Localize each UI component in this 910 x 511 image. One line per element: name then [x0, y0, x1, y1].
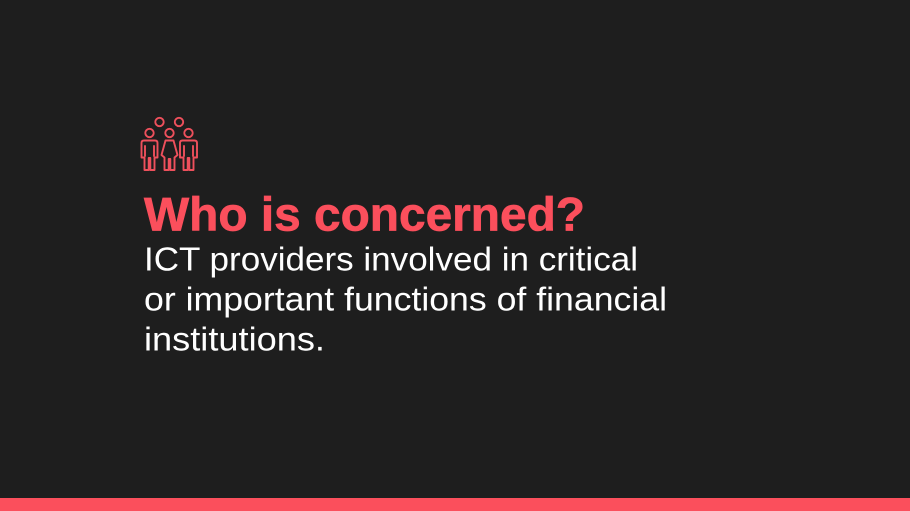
icon: group of people [142, 118, 197, 170]
body text [144, 240, 667, 358]
bottom accent bar [0, 498, 910, 511]
body text: or important functions of financial [144, 280, 667, 318]
body text: institutions. [144, 320, 325, 358]
body text: ICT providers involved in critical [144, 240, 638, 278]
title: Who is concerned? [144, 188, 585, 240]
